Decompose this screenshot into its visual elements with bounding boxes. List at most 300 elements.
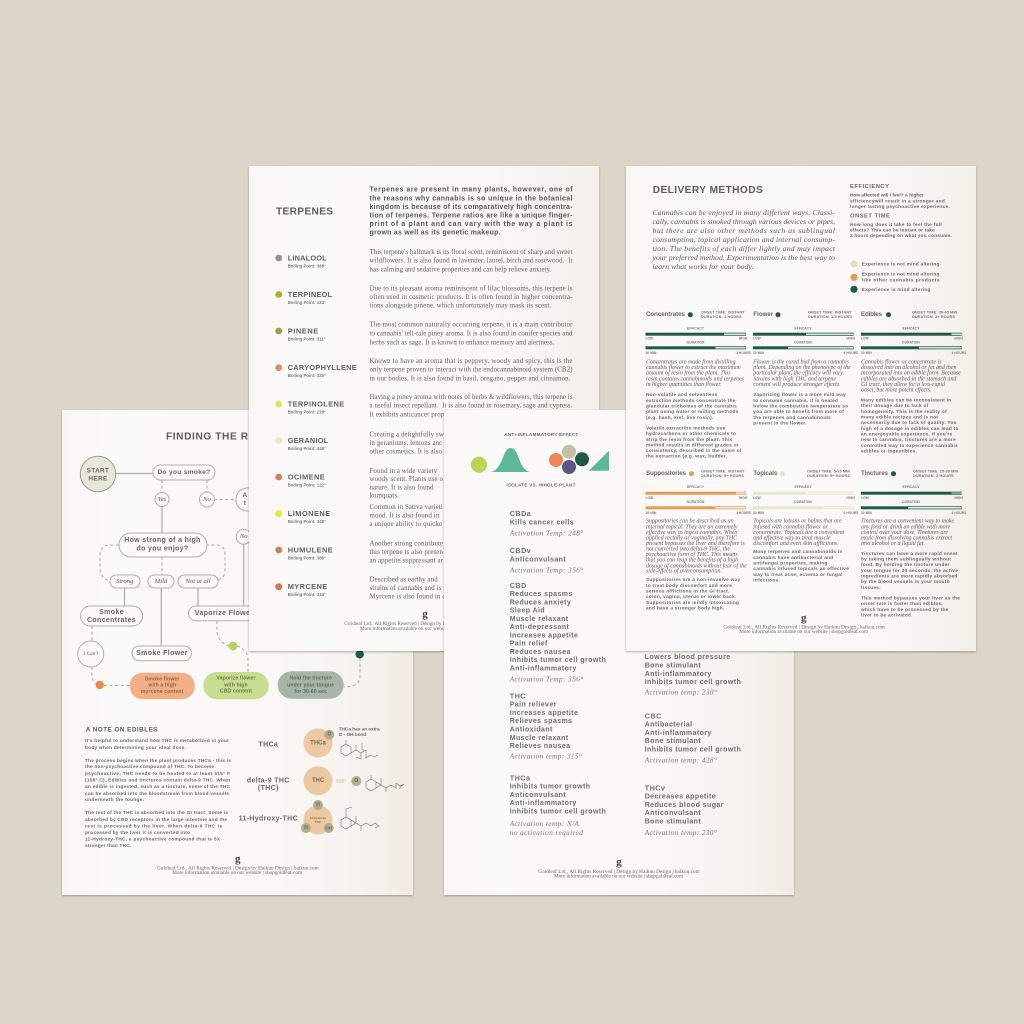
text block: efficiency and onset time: 2 hours depending on what you consume. bbox=[850, 233, 952, 238]
list: cannabinoid cbda: Kills cancer cells bbox=[510, 520, 574, 526]
list: cannabinoid thca: Anticonvulsant bbox=[510, 792, 566, 799]
diagram: thc compounds bbox=[239, 726, 404, 834]
question: how strong: do you enjoy? bbox=[136, 546, 188, 552]
list: cannabinoid thcv: Decreases appetite bbox=[645, 794, 716, 800]
list: cannabinoid partial column: Activation temp: 230° bbox=[644, 688, 717, 696]
text block: terpene descriptions: wildflowers. It is also found in lavender, laurel, birch and rosewood. It bbox=[370, 258, 572, 264]
list: cannabinoid cbd: Reduces spasms bbox=[510, 591, 573, 598]
column: tinctures: your tongue for 30 seconds, the active bbox=[861, 568, 958, 573]
footer: terpenes sheet: Goldleaf Ltd., All Rights Reserved | Design by H bbox=[344, 620, 447, 627]
text block: terpene descriptions: has calming and sedative properties and can help relieve anxiety. bbox=[370, 266, 552, 274]
answer: i can't bbox=[78, 641, 104, 667]
column: concentrates: consistency, described in the name of bbox=[646, 448, 742, 453]
column: flower: below the combustion temperature so bbox=[753, 404, 848, 408]
column: suppositories: Suppositories are a non-invasive way bbox=[646, 577, 741, 582]
text block: terpene intro: kingdom is because of its comparatively high concentra- bbox=[370, 204, 573, 211]
list: cannabinoid cbd: Activation Temp: 356° bbox=[509, 675, 584, 683]
text block: terpene descriptions: tions alongside pinene, which unfortunately may mask its scent. bbox=[370, 302, 552, 310]
text block: terpene intro: tion of terpenes. Terpene ratios are like a unique finger- bbox=[370, 212, 573, 220]
column: concentrates: (e.g. hash, kief, live rosin). bbox=[646, 415, 714, 420]
column: suppositories: ONSET TIME: INSTANT bbox=[701, 469, 745, 473]
answer: i can't: I Can't bbox=[82, 651, 99, 657]
compound: 11-hydroxy-thc: OH bbox=[325, 826, 332, 830]
footer: finding sheet: g bbox=[235, 853, 241, 865]
answer: no: No bbox=[202, 496, 212, 503]
list: cannabinoid partial column: Bone stimulant bbox=[645, 662, 701, 670]
legend: mind altering experience: Experience is mind altering bbox=[862, 287, 931, 292]
list: cannabinoid thc: Relieves spasms bbox=[510, 718, 572, 725]
list: cannabinoid cbd: Anti-inflammatory bbox=[510, 666, 577, 672]
column: flower: Flower is the cured bud from a cannabis bbox=[752, 358, 850, 365]
text block: a note on edibles: rest is processed by the liver. When delta-9 THC is bbox=[85, 824, 222, 828]
terpene: caryophyllene bbox=[275, 363, 357, 378]
terpene: humulene bbox=[275, 546, 333, 560]
list: cannabinoid cbd: Reduces anxiety bbox=[510, 600, 571, 606]
column: flower: DURATION: 1.5 HOURS bbox=[808, 315, 852, 319]
list: cannabinoid cbd: Reduces nausea bbox=[510, 649, 571, 656]
text block: terpene descriptions: Described as earthy and bbox=[370, 576, 438, 584]
legend: mind altering experience: Experience is not mind altering bbox=[862, 262, 940, 266]
list: cannabinoid thcv: Reduces blood sugar bbox=[645, 802, 724, 809]
list: cannabinoid cbdv bbox=[509, 546, 584, 574]
list: cannabinoid thca bbox=[509, 774, 606, 837]
column: suppositories: 30 MIN bbox=[646, 511, 657, 515]
column: edibles: GI tract, they allow for a less-rapid bbox=[861, 381, 945, 388]
text block: a note on edibles: psychoactive, THC needs to be heated to at least 315° F bbox=[85, 771, 230, 776]
column: topicals: Many terpenes and cannabinoids in bbox=[753, 549, 843, 554]
compound: thc: THC bbox=[312, 778, 325, 784]
text block: a note on edibles: It's helpful to understand how THC is metabolized in your bbox=[85, 738, 229, 743]
text block: a note on edibles: can be absorbed into the bloodstream from blood vessels bbox=[85, 791, 229, 796]
panel: finding the right product bbox=[62, 410, 413, 895]
terpene: humulene: HUMULENE bbox=[288, 546, 333, 554]
column: flower: particular plant, the efficacy will vary. bbox=[752, 370, 844, 377]
footer: cannabinoid sheet bbox=[538, 856, 700, 880]
column: topicals: EFFICACY bbox=[795, 485, 812, 489]
compound: thca: O - OH bond bbox=[339, 732, 366, 737]
footer: finding sheet bbox=[157, 853, 319, 876]
column: edibles: their dosage due to lack of bbox=[861, 403, 929, 408]
text block: a note on edibles: body when determining your ideal dose. bbox=[85, 745, 186, 750]
list: terpene names and boiling points bbox=[275, 254, 357, 597]
column: topicals: and effective way to treat muscle bbox=[753, 534, 831, 542]
text block: terpene descriptions bbox=[370, 249, 573, 600]
terpene: terpinolene: TERPINOLENE bbox=[288, 400, 344, 408]
column: flower: ONSET TIME: INSTANT bbox=[808, 310, 852, 314]
list: cannabinoid cbc: Activation temp: 428° bbox=[644, 756, 717, 764]
text block: a note on edibles: absorbed by CBD receptors in the large intestine and the bbox=[85, 817, 227, 822]
column: concentrates: in higher quantities than flower. bbox=[646, 381, 721, 388]
column: suppositories: psychoactive form of THC. This means bbox=[645, 551, 738, 558]
text block: terpene intro: print of a plant and can vary with the way a plant is bbox=[370, 221, 573, 228]
column: topicals: antifungal properties, making bbox=[753, 560, 828, 566]
column: flower: the terpenes and cannabinoids bbox=[753, 415, 831, 420]
column: topicals: discomfort and even skin afflictions. bbox=[753, 540, 839, 547]
column: flower: EFFICACY bbox=[795, 326, 812, 330]
heading: terpenes: TERPENES bbox=[276, 206, 334, 218]
text block: terpene descriptions: in geraniums, lemons anc bbox=[370, 440, 442, 447]
column: concentrates: ONSET TIME: INSTANT bbox=[701, 310, 745, 314]
list: cannabinoid partial column bbox=[644, 654, 741, 696]
text block: a note on edibles: an edible is ingested, such as a tincture, some of the THC bbox=[85, 784, 231, 789]
list: cannabinoid cbc: Anti-inflammatory bbox=[645, 730, 712, 737]
text block: terpene descriptions: Myrcene is also found in c bbox=[370, 594, 445, 600]
column: suppositories: present bypasses the liver and therefore is bbox=[645, 540, 746, 547]
column: flower: LOW bbox=[753, 336, 761, 340]
question: are you: A bbox=[242, 492, 248, 499]
column: edibles: HIGH bbox=[954, 336, 963, 340]
column: concentrates: Non-volatile and solventless bbox=[646, 392, 718, 397]
text block: terpene descriptions: Another strong contribute bbox=[370, 540, 443, 548]
column: topicals: cannabis infused topicals an effective bbox=[753, 566, 849, 571]
text block: terpene intro: Terpenes are present in many plants, however, one of bbox=[370, 186, 573, 194]
column: suppositories: internal topical. They are an extremely bbox=[646, 524, 738, 530]
column: edibles bbox=[861, 310, 966, 454]
terpene: terpinolene: Boiling Point: 220° bbox=[288, 410, 326, 414]
list: cannabinoid thcv: Bone stimulant bbox=[645, 818, 701, 826]
column: concentrates: HIGH bbox=[739, 336, 748, 340]
column: edibles: Cannabis flower or concentrate is bbox=[861, 358, 942, 365]
chart: isolate vs whole-plant effect bbox=[471, 432, 609, 488]
column: suppositories: Suppositories can be described as an bbox=[646, 519, 734, 525]
list: cannabinoid cbda bbox=[509, 509, 584, 537]
text block: efficiency and onset time: longer lasting psychoactive experience. bbox=[850, 204, 950, 209]
footer: terpenes sheet bbox=[344, 608, 447, 632]
compound: 11-hydroxy-thc: THC bbox=[315, 820, 322, 824]
footer: delivery sheet bbox=[723, 612, 885, 635]
list: cannabinoid cbda: CBDa bbox=[510, 509, 532, 518]
column: concentrates: resin contains cannabinoids and terpenes bbox=[646, 376, 745, 382]
list: cannabinoid cbd: CBD bbox=[510, 581, 527, 590]
list: cannabinoid thca: THCa bbox=[510, 774, 531, 782]
result: smoke concentrates: Smoke bbox=[99, 609, 124, 616]
footer: delivery sheet: Goldleaf Ltd., All Rights Reserved | Design by Haikuu Design | haikuu.com bbox=[723, 623, 885, 630]
question: how strong bbox=[119, 533, 207, 557]
column: concentrates bbox=[646, 310, 751, 458]
list: cannabinoid thc bbox=[509, 692, 582, 760]
column: concentrates: cannabis flower to extract the maximum bbox=[646, 364, 741, 371]
terpene: linalool bbox=[275, 254, 327, 268]
recommendation: smoke flower high myrcene bbox=[130, 673, 195, 699]
chart: isolate vs whole-plant effect: ISOLATE VS. WHOLE-PLANT bbox=[506, 482, 576, 488]
start here node: START bbox=[87, 468, 109, 474]
list: cannabinoid cbdv: CBDv bbox=[510, 546, 531, 555]
list: cannabinoid cbda: Activation Temp: 248° bbox=[509, 529, 584, 537]
compound: thc bbox=[304, 766, 404, 795]
compound: 11-hydroxy-thc: 11-Hydroxy bbox=[310, 816, 326, 820]
column: edibles: onset, but more potent effects. bbox=[861, 386, 931, 394]
column: suppositories: DURATION: 5+ HOURS bbox=[701, 474, 744, 478]
column: suppositories: Suppositories are mildly intoxicating bbox=[646, 600, 739, 605]
terpene: limonene bbox=[275, 509, 330, 524]
column: topicals: infused with cannabis flower or bbox=[753, 523, 829, 530]
column: tinctures: LOW bbox=[861, 496, 869, 500]
text block: terpene intro: the reasons why cannabis is so unique in the botanical bbox=[370, 195, 573, 202]
column: suppositories: dosage of cannabinoids without fear of the bbox=[646, 562, 747, 569]
list: cannabinoid cbc: Antibacterial bbox=[645, 722, 693, 728]
question: how strong: How strong of a high bbox=[124, 537, 201, 544]
column: suppositories: HIGH bbox=[739, 496, 748, 500]
column: topicals: concentrate. Topicals are a convenient bbox=[753, 530, 845, 536]
column: tinctures: liver to be activated. bbox=[861, 612, 913, 618]
list: cannabinoid thcv bbox=[644, 784, 724, 837]
diagram: thc compounds: (THC) bbox=[258, 785, 279, 792]
recommendation: hold tincture: Hold the tincture bbox=[289, 676, 332, 682]
text block: terpene intro bbox=[370, 186, 573, 236]
terpene: linalool: Boiling Point: 388° bbox=[288, 264, 326, 268]
text block: terpene descriptions: Common in Sativa varieti bbox=[370, 504, 443, 511]
column: topicals: LOW bbox=[753, 496, 761, 500]
legend: mind altering experience: like other cannabis products bbox=[862, 278, 940, 282]
list: cannabinoid thcv: Activation temp: 230° bbox=[644, 829, 717, 837]
column: suppositories: colon, vagina, uterus or lower back. bbox=[646, 594, 737, 599]
compound: thc: 315° bbox=[336, 778, 346, 784]
recommendation: smoke flower high myrcene: with a high bbox=[147, 683, 176, 689]
answer: no bbox=[200, 492, 214, 507]
list: cannabinoid thc: Relieves nausea bbox=[510, 743, 570, 750]
column: edibles: EFFICACY bbox=[903, 326, 920, 330]
list: cannabinoid cbd: Anti-depressant bbox=[510, 624, 570, 631]
column: edibles: edibles are absorbed in the stomach and bbox=[861, 376, 956, 382]
column: tinctures: HIGH bbox=[954, 496, 963, 500]
terpene: geraniol: GERANIOL bbox=[288, 436, 329, 445]
panel: terpenes bbox=[249, 166, 599, 651]
column: concentrates: Volatile extraction methods use bbox=[646, 426, 726, 430]
column: concentrates: DURATION bbox=[687, 340, 705, 344]
column: edibles: necessarily due to lack of quality. Too bbox=[861, 420, 957, 425]
flowchart bbox=[78, 456, 364, 699]
text block: terpene descriptions: strains of cannabis and is bbox=[370, 585, 442, 592]
column: tinctures: by taking them sublingually without bbox=[861, 556, 951, 562]
column: topicals: Topicals bbox=[753, 470, 778, 477]
column: edibles: edibles or ingestibles. bbox=[861, 448, 917, 454]
column: edibles: ONSET TIME: 30-45 MIN bbox=[912, 310, 958, 314]
text block: terpene descriptions: Found in a wide variety bbox=[370, 468, 438, 475]
terpene: geraniol: Boiling Point: 446° bbox=[288, 446, 326, 451]
terpene: ocimene bbox=[275, 472, 326, 488]
answer: no second: No bbox=[239, 533, 248, 540]
column: edibles: many edible recipes and is not bbox=[861, 414, 938, 420]
terpene: terpinolene bbox=[275, 400, 344, 414]
column: suppositories bbox=[645, 469, 751, 610]
diagram: thc compounds: delta-9 THC bbox=[247, 778, 290, 784]
text block: terpene descriptions: a useful insect repellant. It is also found in rosemary, sage and cypress. bbox=[370, 402, 573, 410]
text block: delivery intro: consumption, topical application and internal consump- bbox=[652, 235, 835, 244]
terpene: pinene: Boiling Point: 311° bbox=[288, 336, 326, 342]
panel: cannabinoids bbox=[444, 410, 794, 895]
list: cannabinoid thc: Increases appetite bbox=[510, 710, 578, 717]
column: tinctures: food. By holding the tincture under bbox=[861, 562, 950, 567]
text block: terpene descriptions: Known to have an aroma that is peppery, woody and spicy, this is the bbox=[370, 358, 572, 365]
column: flower: 30 MIN bbox=[753, 351, 764, 355]
recommendation: vaporize flower high cbd: Vaporize flower bbox=[216, 676, 256, 682]
diagram: thc compounds: 11-Hydroxy-THC bbox=[239, 816, 298, 822]
list: cannabinoid cbc: CBC bbox=[645, 712, 662, 720]
terpene: limonene: LIMONENE bbox=[288, 509, 330, 518]
column: flower: HIGH bbox=[846, 336, 855, 340]
column: suppositories: to treat body discomfort and more bbox=[646, 583, 732, 588]
text block: efficiency and onset time: How affected will I feel? A higher bbox=[850, 192, 924, 198]
column: edibles: new to cannabis, tinctures are a more bbox=[861, 437, 956, 442]
column: flower: Strains with high THC and terpene bbox=[753, 376, 836, 382]
column: concentrates: extraction methods concentrate the bbox=[646, 398, 736, 403]
column: suppositories: serious afflictions in the GI tract, bbox=[646, 588, 730, 594]
column: edibles: high of a dosage in edibles can lead to bbox=[861, 426, 959, 431]
terpene: caryophyllene: CARYOPHYLLENE bbox=[288, 363, 357, 372]
column: suppositories: EFFICACY bbox=[687, 485, 705, 489]
column: topicals: way to treat acne, eczema or fungal bbox=[752, 572, 843, 577]
list: cannabinoid cbdv: Activation Temp: 356° bbox=[509, 566, 584, 574]
text block: delivery intro: Cannabis can be enjoyed in many different ways. Classi- bbox=[652, 208, 835, 217]
start here node: HERE bbox=[88, 476, 108, 482]
result: smoke flower: Smoke Flower bbox=[136, 650, 188, 657]
column: flower bbox=[752, 310, 858, 426]
column: topicals: 4 HOURS bbox=[844, 511, 858, 515]
footer: delivery sheet: g bbox=[801, 612, 807, 624]
column: edibles: 4 HOURS bbox=[952, 351, 966, 355]
recommendation: vaporize flower high cbd: CBD content bbox=[220, 689, 252, 695]
text block: a note on edibles: the non-psychoactive compound of THC. To become bbox=[85, 764, 214, 769]
result: vaporize flower: Vaporize Flower bbox=[195, 610, 253, 617]
column: edibles: controlled way to experience cannabis bbox=[861, 443, 958, 448]
text block: delivery intro: but there are also other methods such as sublingual bbox=[652, 226, 835, 235]
result: smoke flower bbox=[132, 646, 192, 661]
column: suppositories: not converted into delta-9 THC, the bbox=[646, 547, 730, 553]
result: smoke concentrates: Concentrates bbox=[87, 617, 136, 624]
text block: terpene descriptions: nature. It is also found bbox=[370, 484, 434, 492]
column: tinctures: Tinctures bbox=[861, 470, 889, 477]
compound: thca: THCa has an extra bbox=[339, 726, 380, 732]
column: flower: you are able to benefit from more of bbox=[753, 409, 844, 414]
terpene: terpineol: Boiling Point: 423° bbox=[288, 300, 326, 305]
list: cannabinoid thcv: THCv bbox=[645, 784, 665, 792]
column: suppositories: DURATION bbox=[687, 500, 705, 504]
column: tinctures: made from dissolving cannabis extract bbox=[861, 534, 952, 542]
recommendation: smoke flower high myrcene: myrcene content bbox=[141, 689, 184, 695]
column: topicals: DURATION: 5+ HOURS bbox=[807, 474, 850, 478]
column: topicals: Topicals are lotions or balms that are bbox=[753, 519, 842, 525]
column: tinctures: into alcohol or a liquid fat. bbox=[861, 540, 925, 547]
marker: dark dot bbox=[356, 650, 364, 658]
footer: terpenes sheet: More information available on our webs bbox=[360, 625, 444, 632]
text block: terpene descriptions: other cosmetics. It is also bbox=[370, 448, 443, 456]
compound: thc: O bbox=[354, 778, 358, 784]
column: tinctures: 4 HOURS bbox=[952, 511, 966, 515]
terpene: myrcene: Boiling Point: 334° bbox=[288, 592, 326, 597]
terpene: pinene bbox=[275, 326, 326, 342]
column: topicals: 30 MIN bbox=[753, 511, 764, 515]
list: cannabinoid cbc bbox=[644, 712, 741, 764]
diagram: thc compounds: THCa bbox=[258, 742, 278, 748]
column: edibles: DURATION bbox=[902, 340, 920, 344]
terpene: terpineol bbox=[275, 290, 333, 305]
column: edibles: DURATION: 3+ HOURS bbox=[912, 315, 955, 319]
text block: terpene descriptions: The most common naturally occurring terpene, it is a main contributor bbox=[370, 322, 573, 328]
column: topicals bbox=[752, 469, 858, 582]
column: edibles: Edibles bbox=[861, 311, 883, 318]
column: flower: 4 HOURS bbox=[844, 351, 858, 355]
column: concentrates: strip the resin from the plant. This bbox=[646, 437, 733, 442]
column: suppositories: effective way to ingest cannabis. When bbox=[646, 529, 737, 536]
compound: 11-hydroxy-thc bbox=[301, 800, 379, 834]
question: are you: t bbox=[244, 500, 247, 507]
list: cannabinoid thca: Inhibits tumor cell growth bbox=[510, 808, 606, 816]
answer: no second bbox=[236, 529, 251, 544]
column: tinctures: This method bypasses your liver as the bbox=[861, 596, 960, 600]
column: concentrates: amount of resin from the plant. This bbox=[646, 370, 731, 377]
list: cannabinoid thca: Activation temp: N/A bbox=[509, 820, 580, 828]
column: tinctures: 30 MIN bbox=[861, 511, 872, 515]
column: concentrates: DURATION: 3 HOURS bbox=[701, 315, 742, 319]
list: cannabinoid cbc: Bone stimulant bbox=[645, 738, 701, 745]
column: tinctures: Tinctures are a convenient way to make bbox=[861, 519, 955, 525]
list: cannabinoid thca: Anti-inflammatory bbox=[510, 800, 577, 807]
column: tinctures bbox=[860, 469, 966, 618]
column: flower: to consume cannabis. It is heated bbox=[753, 398, 838, 403]
text block: terpene descriptions: this terpene is also presen bbox=[370, 549, 443, 556]
column: flower: present in the flower. bbox=[753, 420, 807, 426]
question: do you smoke bbox=[153, 465, 215, 480]
text block: terpene descriptions: Having a piney aroma with notes of herbs & wildflowers, this terpene is bbox=[370, 394, 573, 401]
list: cannabinoid cbd: Increases appetite bbox=[510, 632, 578, 640]
chart: isolate vs whole-plant effect: ANTI-INFLAMMATORY EFFECT bbox=[504, 432, 578, 437]
result: vaporize flower bbox=[188, 606, 258, 621]
list: cannabinoid partial column: Inhibits tumor cell growth bbox=[645, 679, 741, 686]
column: topicals: cannabis have antibacterial and bbox=[753, 555, 833, 560]
footer: terpenes sheet: g bbox=[422, 608, 428, 620]
start here node bbox=[80, 456, 116, 492]
column: suppositories: and have a stronger body high. bbox=[646, 606, 725, 610]
text block: a note on edibles: (158° C). Edibles and tinctures contain delta-9 THC. When bbox=[85, 778, 230, 782]
terpene: limonene: Boiling Point: 349° bbox=[288, 519, 326, 524]
question: are you bbox=[236, 488, 276, 511]
column: flower: plant. Depending on the phenotype of the bbox=[752, 364, 851, 371]
text block: efficiency and onset time bbox=[850, 184, 952, 238]
list: cannabinoid cbdv: Anticonvulsant bbox=[510, 556, 566, 564]
heading: delivery methods: DELIVERY METHODS bbox=[653, 185, 764, 196]
column: tinctures: ONSET TIME: 15-30 MIN bbox=[913, 469, 959, 473]
terpene: linalool: LINALOOL bbox=[288, 254, 327, 262]
recommendation: smoke flower high myrcene: Smoke flower bbox=[145, 676, 179, 682]
column: edibles: LOW bbox=[861, 336, 869, 340]
text block: delivery intro: your preferred method. Experimentation is the best way to bbox=[652, 253, 835, 262]
text block: a note on edibles: processed by the liver it is converted into bbox=[85, 830, 190, 835]
answer: not at all bbox=[178, 575, 218, 588]
column: tinctures: Tinctures can have a more rapid onset bbox=[861, 551, 958, 556]
column: suppositories: Suppositories bbox=[646, 470, 687, 477]
list: cannabinoid thc: Pain reliever bbox=[510, 702, 557, 708]
column: tinctures: by the blood vessels in your mouth bbox=[861, 579, 950, 584]
terpene: ocimene: Boiling Point: 122° bbox=[288, 482, 326, 488]
column: edibles: incorporated into an edible form. Because bbox=[861, 370, 961, 377]
text block: delivery intro: tion. The benefits of each differ lightly and may impact bbox=[652, 244, 836, 253]
list: cannabinoid cbd: Sleep Aid bbox=[510, 608, 545, 614]
marker: green dot bbox=[229, 642, 237, 650]
terpene: myrcene: MYRCENE bbox=[288, 582, 327, 591]
text block: terpene descriptions: woody scent. Plants use o bbox=[370, 476, 443, 483]
terpene: myrcene bbox=[275, 582, 327, 597]
column: concentrates: 4 HOURS bbox=[736, 351, 751, 355]
text block: a note on edibles: A NOTE ON EDIBLES bbox=[86, 726, 158, 734]
list: cannabinoid partial column: Lowers blood pressure bbox=[645, 654, 731, 661]
recommendation: hold tincture: under your tongue bbox=[287, 682, 334, 688]
footer: cannabinoid sheet: g bbox=[616, 856, 622, 868]
column: tinctures: DURATION: 2 HOURS bbox=[913, 474, 954, 478]
footer: delivery sheet: More information available on our website | shopgoldleaf.com bbox=[739, 628, 868, 635]
column: tinctures: control over your dose. Tinctures are bbox=[861, 530, 948, 536]
text block: delivery intro: learn what works for your body. bbox=[652, 262, 754, 271]
column: concentrates: 30 MIN bbox=[646, 351, 657, 355]
